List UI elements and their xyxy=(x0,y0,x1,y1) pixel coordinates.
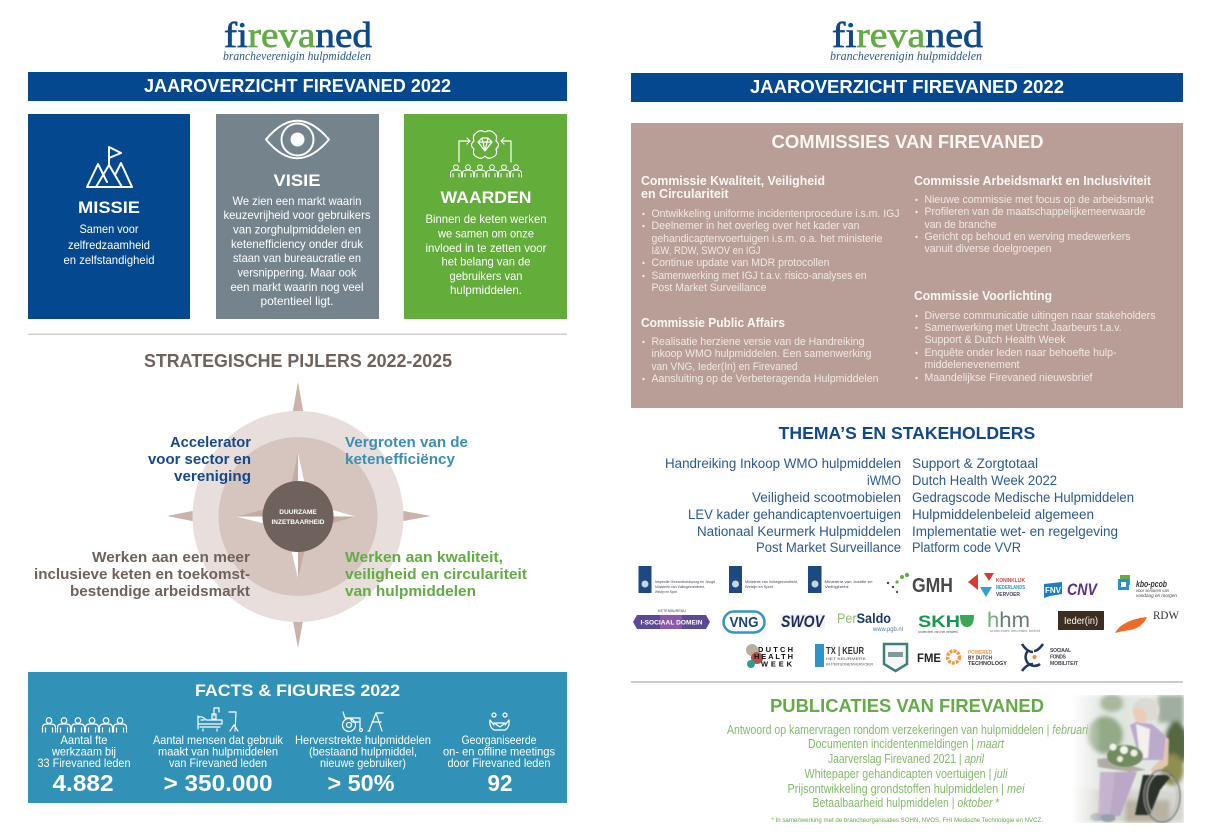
commissie: kwaliteit: gehandicaptenvoertuigen i.s.m. o.a. het ministerie xyxy=(652,233,882,245)
logo: fnv cnv: CNV xyxy=(1067,580,1098,599)
logo: ministerie jenv: Veiligheid xyxy=(824,584,848,589)
pillar: arbeidsmarkt: Werken aan een meer xyxy=(92,549,250,566)
stat: meetings: 92 xyxy=(488,770,512,796)
icon: bed and cane xyxy=(198,708,238,731)
commissie: kwaliteit: Continue update van MDR protocollen xyxy=(652,257,830,269)
pillar: kwaliteit: van hulpmiddelen xyxy=(345,583,476,600)
heading: facts and figures: FACTS & FIGURES 2022 xyxy=(195,681,400,700)
footnote: * In samenwerking met de brancheorganisaties SOHN, NVOS, FHI Medische Technologie en NVCZ. xyxy=(772,817,1043,824)
text: visie: versnippering. Maar ook xyxy=(238,266,357,280)
commissie: arbeidsmarkt: van de branche xyxy=(924,219,996,231)
logo: hhm: onderzoek innovatie beleid xyxy=(990,629,1040,633)
stat: gebruikers: maakt van hulpmiddelen xyxy=(158,744,278,758)
stat: meetings: door Firevaned leden xyxy=(448,756,550,770)
commissie: arbeidsmarkt: Commissie Arbeidsmarkt en Inclusiviteit xyxy=(914,173,1152,188)
icon: people xyxy=(42,718,126,732)
pillar: ketenefficiency xyxy=(345,434,468,468)
text: visie: staan van bureaucratie en xyxy=(233,251,361,265)
list: thema's: Post Market Surveillance xyxy=(756,540,901,555)
logo: sociaal fonds mobiliteit: FONDS xyxy=(1050,654,1067,660)
commissie: arbeidsmarkt xyxy=(914,173,1154,255)
list: publicaties: Documenten incidentenmeldingen | maart xyxy=(808,737,1004,751)
commissie: kwaliteit: I&W, RDW, SWOV en IGJ xyxy=(652,245,760,257)
text: visie: een markt waarin nog veel xyxy=(230,280,364,294)
text: waarden: invloed in te zetten voor xyxy=(426,241,546,255)
commissie: kwaliteit: en Circulariteit xyxy=(641,186,729,201)
logo: kbo-pcob xyxy=(1118,575,1178,598)
header bar right: JAAROVERZICHT FIREVANED 2022 xyxy=(750,77,1064,97)
logo: vng: VNG xyxy=(730,614,758,631)
panel: commissies xyxy=(631,123,1183,408)
text: missie: zelfredzaamheid xyxy=(68,238,150,252)
list: thema's: Nationaal Keurmerk Hulpmiddelen xyxy=(697,524,901,539)
photo: woman in wheelchair xyxy=(1071,694,1188,823)
commissie: public affairs: Realisatie herziene versie van de Handreiking xyxy=(652,336,864,348)
list: thema's: Handreiking Inkoop WMO hulpmiddelen xyxy=(665,456,901,471)
list: publicaties: Betaalbaarheid hulpmiddelen | oktober * xyxy=(812,796,1000,810)
logo: tx keur xyxy=(815,644,873,667)
pillar: ketenefficiency: ketenefficiëncy xyxy=(345,451,456,468)
commissie: voorlichting: Maandelijkse Firevaned nieuwsbrief xyxy=(924,372,1093,384)
commissie: public affairs: van VNG, Ieder(In) en Firevaned xyxy=(652,361,798,373)
pillar: kwaliteit: Werken aan kwaliteit, xyxy=(345,549,503,566)
pillar: ketenefficiency: Vergroten van de xyxy=(345,434,468,451)
list: thema's: Veiligheid scootmobielen xyxy=(752,490,901,505)
stat: meetings xyxy=(443,713,555,796)
heading: publicaties: PUBLICATIES VAN FIREVANED xyxy=(770,696,1044,716)
text: waarden: we samen om onze xyxy=(437,226,534,240)
panel: waarden xyxy=(404,114,567,319)
logo: dutch health week xyxy=(746,644,793,668)
commissie: voorlichting xyxy=(914,288,1156,384)
pillar: arbeidsmarkt xyxy=(34,549,250,600)
logo: i-sociaal domein xyxy=(633,608,710,629)
pillar: accelerator: voor sector en xyxy=(148,451,251,468)
label: duurzame inzetbaarheid xyxy=(272,509,325,526)
commissie: kwaliteit: Deelnemer in het overleg over het kader van xyxy=(652,220,860,232)
stat: fte: 4.882 xyxy=(52,770,114,796)
list: stakeholders: Support & Zorgtotaal xyxy=(912,456,1038,471)
logo: swov: SWOV xyxy=(781,612,825,631)
logo: vng xyxy=(724,612,764,632)
logo: ieder(in): Ieder(in) xyxy=(1064,616,1098,627)
pillar: kwaliteit: veiligheid en circulariteit xyxy=(345,566,527,583)
pillar: accelerator xyxy=(148,434,251,485)
logo: fme xyxy=(917,650,1007,667)
photo background: plants xyxy=(1071,694,1188,823)
logo: inspectie xyxy=(638,566,715,594)
pillar: arbeidsmarkt: bestendige arbeidsmarkt xyxy=(70,583,250,600)
pillar: arbeidsmarkt: inclusieve keten en toekomst- xyxy=(34,566,250,583)
logo: sociaal fonds mobiliteit: SOCIAAL xyxy=(1050,648,1071,654)
logo: skh xyxy=(918,612,974,634)
pillar: accelerator: Accelerator xyxy=(170,434,251,451)
list: publicaties: Jaarverslag Firevaned 2021 | april xyxy=(828,752,985,766)
logo: dutch health week: WEEK xyxy=(761,660,793,668)
logo: tx keur: HET KEURMERK xyxy=(826,656,866,661)
logo: shield xyxy=(884,644,907,671)
header bar left: JAAROVERZICHT FIREVANED 2022 xyxy=(144,76,451,96)
list: stakeholders: Platform code VVR xyxy=(912,540,1021,555)
logo: firevaned left: brancheverenigin hulpmiddelen xyxy=(223,48,371,63)
logo: skh: onderdeel van het netwerk xyxy=(918,630,958,634)
commissie: arbeidsmarkt: Gericht op behoud en werving medewerkers xyxy=(924,231,1131,243)
commissie: kwaliteit: Commissie Kwaliteit, Veiligheid xyxy=(641,173,825,188)
logo: hhm: hhm xyxy=(987,609,1030,632)
heading: missie: MISSIE xyxy=(78,198,140,217)
heading: visie: VISIE xyxy=(274,171,320,190)
stat: meetings: Georganiseerde xyxy=(462,733,537,747)
logo: persaldo xyxy=(837,610,903,633)
text: waarden: gebruikers van xyxy=(450,269,522,283)
list: thema's xyxy=(665,456,901,555)
panel: visie xyxy=(216,114,379,319)
logo: skh: SKH xyxy=(918,612,960,631)
commissie: voorlichting: Diverse communicatie uitingen naar stakeholders xyxy=(924,310,1156,322)
text: visie xyxy=(224,194,370,308)
text: visie: We zien een markt waarin xyxy=(232,194,362,208)
text: missie: en zelfstandigheid xyxy=(64,253,154,267)
heading: waarden: WAARDEN xyxy=(440,188,532,207)
logo: ieder(in) xyxy=(1058,611,1104,630)
panel: facts and figures xyxy=(28,672,567,803)
logo: fnv cnv: FNV xyxy=(1045,586,1062,595)
logo: dutch health week: HEALTH xyxy=(754,652,793,661)
icon: meeting xyxy=(490,713,509,730)
commissie: voorlichting: middelenevenement xyxy=(924,359,1020,371)
logo: persaldo: www.pgb.nl xyxy=(872,627,903,633)
label: duurzame inzetbaarheid: DUURZAME xyxy=(279,509,317,516)
text: waarden xyxy=(426,212,546,297)
list: publicaties xyxy=(727,723,1089,810)
commissie: voorlichting: Commissie Voorlichting xyxy=(914,288,1052,303)
list: stakeholders xyxy=(912,456,1134,555)
list: stakeholders: Hulpmiddelenbeleid algemeen xyxy=(912,507,1094,522)
logo: inspectie: Welzijn en Sport xyxy=(655,589,678,594)
commissie: voorlichting: Enquête onder leden naar behoefte hulp- xyxy=(924,347,1117,359)
stat: gebruikers xyxy=(153,708,284,796)
logo: inspectie: Inspectie Gezondheidszorg en Jeugd xyxy=(655,579,715,584)
text: missie xyxy=(64,222,154,267)
stat: gebruikers: > 350.000 xyxy=(164,770,272,796)
logo: fme: FME xyxy=(917,651,941,665)
text: waarden: Binnen de keten werken xyxy=(426,212,546,226)
stat: fte: Aantal fte xyxy=(60,733,108,747)
logo: kbo-pcob: kbo-pcob xyxy=(1136,579,1167,589)
commissie: arbeidsmarkt: Nieuwe commissie met focus op de arbeidsmarkt xyxy=(924,194,1154,206)
logo: fme: BY DUTCH xyxy=(968,656,992,662)
stat: gebruikers: Aantal mensen dat gebruik xyxy=(153,733,284,747)
text: waarden: hulpmiddelen. xyxy=(450,283,522,297)
list: thema's: LEV kader gehandicaptenvoertuigen xyxy=(688,507,901,522)
logo: firevaned right: brancheverenigin hulpmiddelen xyxy=(830,48,982,63)
logo: fme: POWERED xyxy=(968,650,992,656)
heading: thema's en stakeholders: THEMA’S EN STAKEHOLDERS xyxy=(779,423,1035,443)
logo: ministerie vws: Welzijn en Sport xyxy=(745,584,774,589)
logo: i-sociaal domein: KETENBUREAU xyxy=(658,608,686,613)
stat: fte: werkzaam bij xyxy=(51,744,116,758)
icon: flower with people xyxy=(450,131,522,177)
commissie: kwaliteit: Post Market Surveillance xyxy=(652,282,766,294)
logo: i-sociaal domein: I-SOCIAAL DOMEIN xyxy=(640,620,703,626)
logo: gmh: GMH xyxy=(912,575,953,597)
panel: missie xyxy=(28,114,190,319)
commissie: kwaliteit xyxy=(641,173,900,294)
logo: kbo-pcob: voor senioren van xyxy=(1136,588,1169,593)
logo: koninklijk nederlands vervoer: KONINKLIJK xyxy=(996,578,1025,584)
photo subject xyxy=(1090,698,1180,822)
header bar right xyxy=(631,73,1183,102)
logo: firevaned left: firevaned xyxy=(224,15,372,55)
logo: ministerie jenv: Ministerie van Justitie en xyxy=(824,579,872,584)
commissie: public affairs: Aansluiting op de Verbeteragenda Hulpmiddelen xyxy=(652,373,878,385)
label: duurzame inzetbaarheid: INZETBAARHEID xyxy=(272,519,325,526)
heading: strategische pijlers: STRATEGISCHE PIJLERS 2022-2025 xyxy=(144,351,452,371)
chart: compass diagram xyxy=(34,382,527,648)
logo: ministerie jenv xyxy=(808,566,872,593)
commissie: voorlichting: Samenwerking met Utrecht Jaarbeurs t.a.v. xyxy=(924,322,1122,334)
list: publicaties: Antwoord op kamervragen rondom verzekeringen van hulpmiddelen | februari xyxy=(727,723,1089,737)
logo: fnv cnv xyxy=(1044,580,1098,599)
logo: gmh xyxy=(887,573,953,597)
logo: sociaal fonds mobiliteit: MOBILITEIT xyxy=(1050,661,1078,667)
header bar left xyxy=(28,72,567,101)
list: publicaties: Prijsontwikkeling grondstoffen hulpmiddelen | mei xyxy=(788,782,1026,796)
text: visie: potentieel ligt. xyxy=(260,294,334,308)
logo: ministerie vws: Ministerie van Volksgezondheid, xyxy=(745,579,798,584)
logo: koninklijk nederlands vervoer xyxy=(968,573,1026,598)
logo: sociaal fonds mobiliteit xyxy=(1022,644,1078,671)
commissie: public affairs: Commissie Public Affairs xyxy=(641,315,785,330)
stat: herverstrekte hulpmiddelen: (bestaand hulpmiddel, xyxy=(309,744,417,758)
stat: fte: 33 Firevaned leden xyxy=(38,756,130,770)
icon: mountain with flag xyxy=(87,147,132,187)
logo: kbo-pcob: vandaag en morgen xyxy=(1136,593,1178,598)
text: waarden: het belang van de xyxy=(442,254,531,268)
commissie: arbeidsmarkt: vanuit diverse doelgroepen xyxy=(924,243,1052,255)
logo: dutch health week: DUTCH xyxy=(758,645,793,654)
icon: wheelchair and walker xyxy=(342,712,383,732)
list: stakeholders: Implementatie wet- en regelgeving xyxy=(912,524,1118,539)
list: stakeholders: Dutch Health Week 2022 xyxy=(912,473,1057,488)
text: visie: van zorghulpmiddelen en xyxy=(233,222,361,236)
logo: koninklijk nederlands vervoer: NEDERLANDS xyxy=(996,585,1026,591)
text: missie: Samen voor xyxy=(80,222,138,236)
text: visie: keuzevrijheid voor gebruikers xyxy=(224,208,370,222)
logo: tx keur: TX | KEUR xyxy=(826,646,865,657)
stat: herverstrekte hulpmiddelen: Herverstrekte hulpmiddelen xyxy=(295,733,431,747)
logo: rdw: RDW xyxy=(1153,610,1179,622)
stat: fte xyxy=(38,718,130,796)
stat: gebruikers: van Firevaned leden xyxy=(169,756,267,770)
commissie: arbeidsmarkt: Profileren van de maatschappelijkemeerwaarde xyxy=(924,206,1146,218)
pillar: accelerator: vereniging xyxy=(174,468,251,485)
logo: tx keur: IN PERSONENVERVOER xyxy=(826,662,873,666)
commissie: voorlichting: Support & Dutch Health Week xyxy=(924,334,1066,346)
commissie: kwaliteit: Samenwerking met IGJ t.a.v. risico-analyses en xyxy=(652,270,866,282)
logo: feather xyxy=(1115,617,1147,633)
logo: inspectie: Ministerie van Volksgezondheid, xyxy=(655,584,705,589)
stat: meetings: on- en offline meetings xyxy=(443,744,555,758)
logo: fme: TECHNOLOGY xyxy=(968,661,1007,667)
commissie: kwaliteit: Ontwikkeling uniforme incidentenprocedure i.s.m. IGJ xyxy=(652,208,900,220)
logo: firevaned right: firevaned xyxy=(832,15,983,55)
stat: herverstrekte hulpmiddelen xyxy=(295,712,431,796)
list: thema's: iWMO xyxy=(867,473,901,488)
icon: eye xyxy=(266,121,329,158)
heading: commissies: COMMISSIES VAN FIREVANED xyxy=(772,132,1044,152)
stat: herverstrekte hulpmiddelen: > 50% xyxy=(328,770,394,796)
pillar: kwaliteit xyxy=(345,549,527,600)
logo: koninklijk nederlands vervoer: VERVOER xyxy=(996,592,1020,598)
commissie: public affairs xyxy=(641,315,878,385)
list: publicaties: Whitepaper gehandicapten voertuigen | juli xyxy=(804,767,1009,781)
logo wall: stakeholders xyxy=(633,566,1179,671)
logo: ministerie vws xyxy=(729,566,798,593)
list: stakeholders: Gedragscode Medische Hulpmiddelen xyxy=(912,490,1134,505)
text: visie: ketenefficiency onder druk xyxy=(231,237,364,251)
logo: persaldo: PerSaldo xyxy=(837,610,891,626)
commissie: public affairs: inkoop WMO hulpmiddelen. Een samenwerking xyxy=(652,348,872,360)
stat: herverstrekte hulpmiddelen: nieuwe gebruiker) xyxy=(320,756,406,770)
